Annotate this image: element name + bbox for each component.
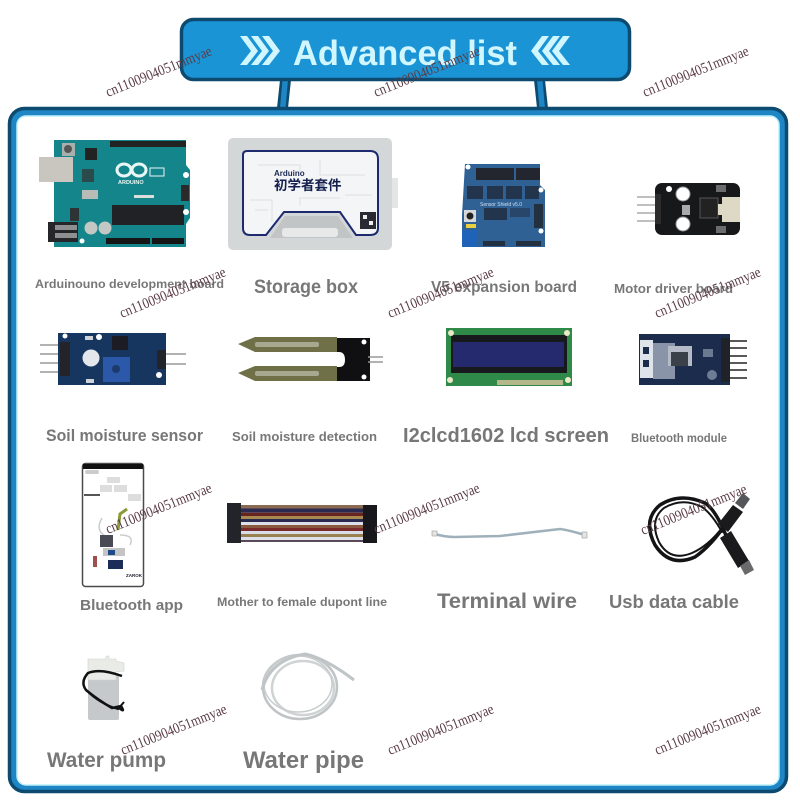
watermarks: cn1100904051mmyae: [386, 701, 497, 759]
watermarks: cn1100904051mmyae: [104, 43, 215, 101]
item: soil moisture detection probe: [232, 337, 383, 444]
item: dupont wires: [217, 503, 387, 609]
watermarks: [104, 43, 764, 759]
label: soil moisture detection: Soil moisture detection: [232, 429, 377, 444]
label: Bluetooth app: Bluetooth app: [80, 597, 183, 614]
watermarks: cn1100904051mmyae: [386, 264, 497, 322]
label: USB cable: Usb data cable: [609, 591, 739, 612]
icon: left chevrons: [240, 36, 280, 65]
icon: Arduino board: [39, 140, 190, 247]
label: Arduino Uno: Arduinouno development board: [35, 277, 224, 291]
icon: water pump: [83, 656, 124, 720]
item: USB cable: [609, 493, 754, 612]
label: motor driver: Motor driver board: [614, 282, 733, 296]
watermarks: cn1100904051mmyae: [641, 43, 752, 101]
watermarks: cn1100904051mmyae: [639, 481, 750, 539]
item: storage box: [228, 138, 398, 298]
watermarks: cn1100904051mmyae: [119, 701, 230, 759]
icon: phone with app: [82, 464, 144, 586]
icon: Bluetooth board: [639, 334, 747, 385]
label: LCD screen: I2clcd1602 lcd screen: [403, 424, 609, 447]
item: Bluetooth module: [631, 334, 747, 445]
icon: soil probe: [238, 337, 383, 381]
watermarks: cn1100904051mmyae: [118, 264, 229, 322]
item: terminal wire: [432, 529, 587, 613]
watermarks: cn1100904051mmyae: [653, 264, 764, 322]
label: storage box: Storage box: [254, 276, 358, 298]
item: V5 expansion board: [431, 164, 577, 296]
icon: storage box: [228, 138, 398, 250]
item: soil moisture sensor: [40, 333, 204, 445]
item: water pipe: [243, 654, 364, 774]
icon: storage box: 初学者套件: [274, 177, 342, 193]
title banner: [182, 20, 630, 80]
icon: LCD 1602: [446, 328, 572, 386]
icon: terminal wire: [432, 529, 587, 538]
item: Arduino Uno board: [35, 140, 224, 291]
icon: water pipe: [262, 654, 354, 719]
label: Bluetooth module: Bluetooth module: [631, 433, 727, 445]
label: water pipe: Water pipe: [243, 747, 364, 774]
label: dupont line: Mother to female dupont line: [217, 595, 387, 609]
label: water pump: Water pump: [47, 749, 166, 772]
label: V5 expansion board: V5 expansion board: [431, 279, 577, 296]
icon: soil sensor module: [40, 333, 186, 385]
label: terminal wire: Terminal wire: [437, 589, 577, 613]
watermarks: cn1100904051mmyae: [104, 480, 215, 538]
item: motor driver board: [614, 183, 740, 296]
item: Bluetooth app: [80, 464, 183, 614]
icon: right chevrons: [531, 36, 570, 65]
icon: USB cable: [650, 493, 754, 575]
icon: Arduino board: ARDUINO: [118, 180, 144, 186]
banner posts: [277, 80, 548, 108]
icon: storage box: Arduino: [274, 169, 305, 178]
item: water pump: [47, 656, 166, 772]
label: soil moisture sensor: Soil moisture sensor: [46, 427, 204, 445]
icon: sensor shield: [462, 164, 545, 247]
item: LCD screen: [403, 328, 609, 447]
watermarks: cn1100904051mmyae: [653, 701, 764, 759]
watermarks: cn1100904051mmyae: [372, 43, 483, 101]
icon: motor driver: [637, 183, 740, 235]
icon: ribbon cable: [227, 503, 377, 543]
icon: sensor shield: Sensor Shield v5.0: [480, 202, 522, 208]
title text: Advanced list: [293, 34, 517, 73]
watermarks: cn1100904051mmyae: [372, 480, 483, 538]
icon: phone with app: ZAROK: [126, 573, 143, 578]
